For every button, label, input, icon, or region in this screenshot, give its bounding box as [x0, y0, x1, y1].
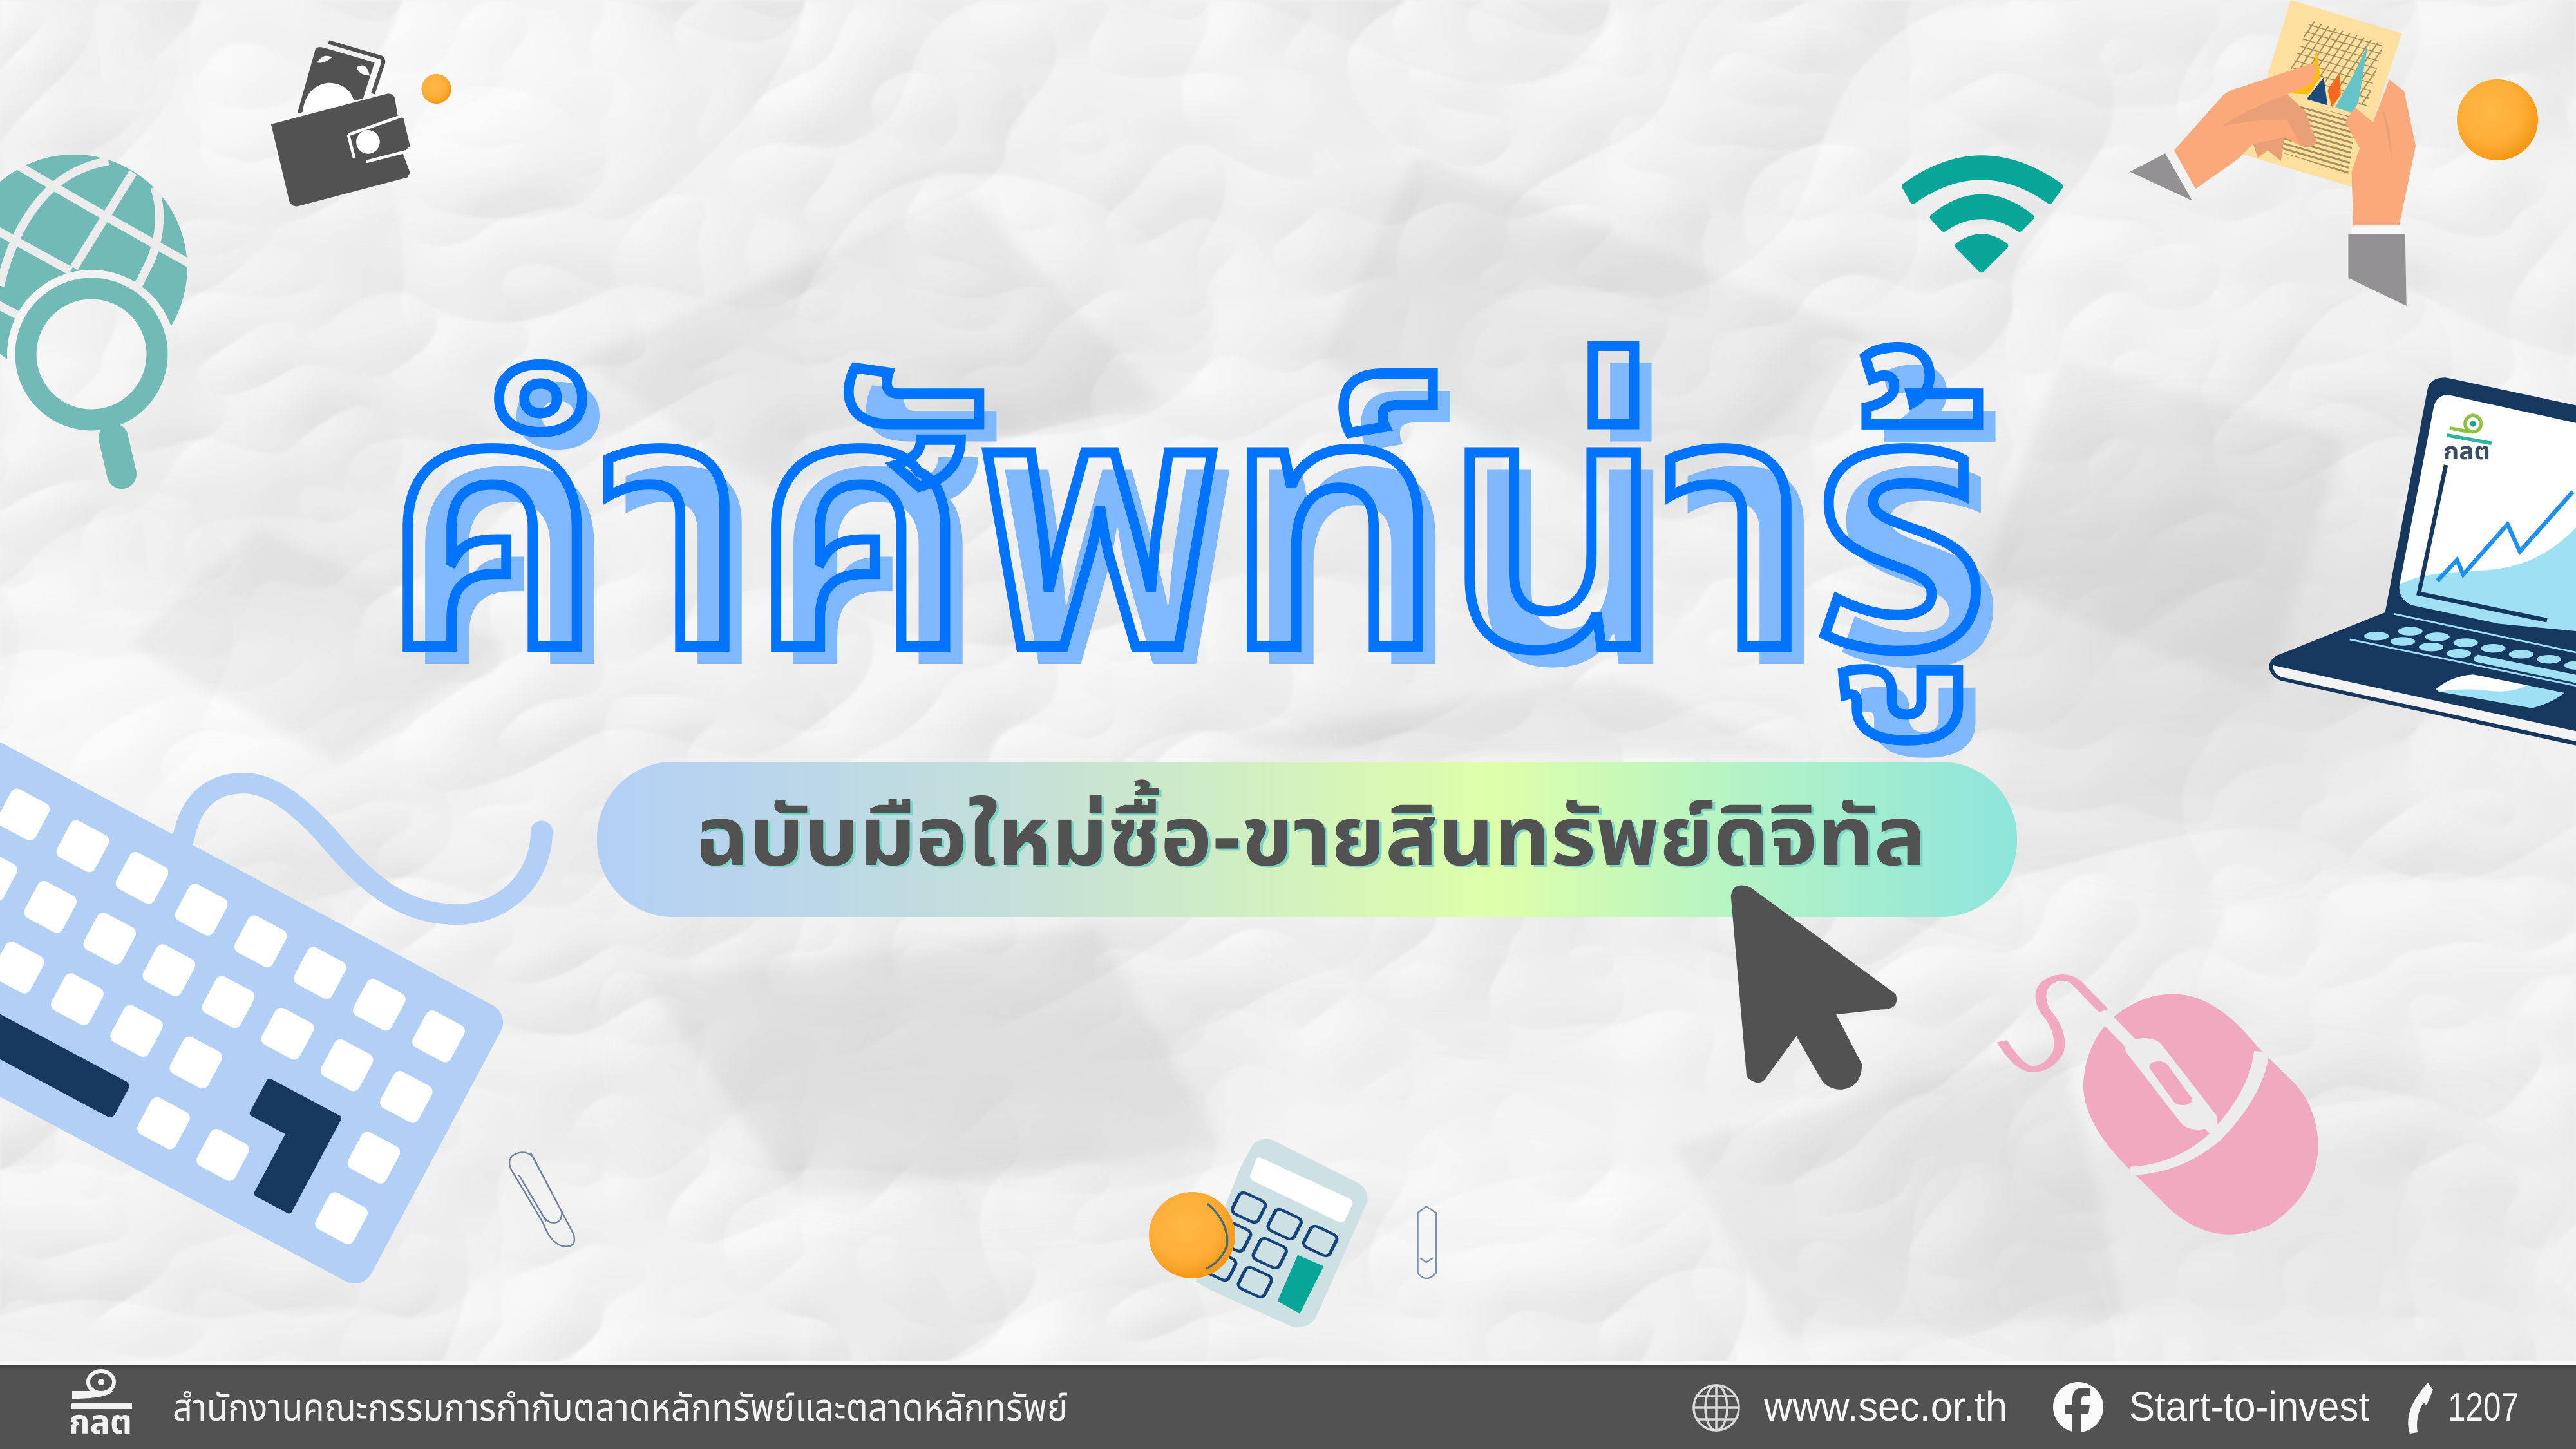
footer logo — [69, 1371, 132, 1441]
laptop screen logo: กลต — [2443, 438, 2490, 464]
laptop screen logo — [2443, 415, 2492, 464]
footer logo: กลต — [69, 1404, 132, 1441]
icon: hands holding chart report — [2130, 0, 2416, 306]
subtitle text: ฉบับมือใหม่ซื้อ-ขายสินทรัพย์ดิจิทัล — [697, 781, 1929, 885]
icon: facebook — [2053, 1382, 2103, 1432]
icon: wifi — [1905, 158, 2060, 269]
footer organisation name: สำนักงานคณะกรรมการกำกับตลาดหลักทรัพย์และตลาดหลักทรัพย์ — [173, 1387, 1068, 1429]
icon: laptop with rising chart — [2269, 377, 2576, 753]
icon: orange coin on calculator — [1149, 1192, 1235, 1278]
icon: paperclip left — [509, 1153, 574, 1247]
icon: globe with magnifier — [0, 155, 197, 474]
icon: phone — [2408, 1383, 2433, 1434]
icon: footer globe — [1694, 1385, 1739, 1430]
icon: pink computer mouse — [2002, 978, 2318, 1235]
icon: small orange dot — [421, 74, 451, 104]
icon: wallet with banknote — [271, 42, 410, 206]
icon: orange ball — [2457, 79, 2538, 160]
footer facebook page name: Start-to-invest — [2129, 1383, 2369, 1430]
subtitle text: ฉบับมือใหม่ซื้อ-ขายสินทรัพย์ดิจิทัล — [694, 779, 1926, 883]
icon: keyboard with cable — [0, 673, 542, 1290]
icon: mouse cursor arrow — [1731, 886, 1897, 1090]
footer website: www.sec.or.th — [1763, 1383, 2007, 1430]
footer hotline number: 1207 — [2448, 1385, 2519, 1430]
title: คำศัพท์น่ารู้ — [399, 343, 2006, 758]
title: คำศัพท์น่ารู้ — [382, 326, 1989, 741]
icon: paperclip small — [1417, 1206, 1436, 1278]
icon: calculator — [1196, 1139, 1367, 1327]
subtitle pill — [597, 762, 2017, 917]
footer bar — [0, 1361, 2576, 1449]
